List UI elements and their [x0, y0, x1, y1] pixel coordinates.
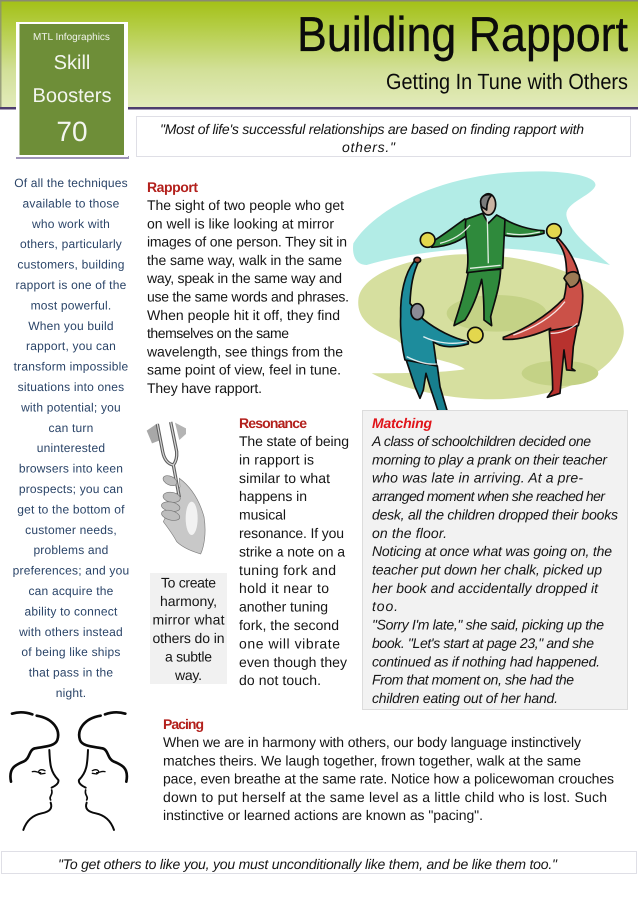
panel: matching: her book and accidentally dropped it — [372, 580, 599, 596]
panel: resonance: tuning fork and — [239, 562, 336, 578]
left column text: Of all the techniques — [14, 176, 128, 190]
panel: rapport: the same way, walk in the same — [147, 252, 342, 268]
panel: resonance: do not touch. — [239, 672, 321, 688]
badge: Skill Boosters 70: Skill — [54, 52, 90, 74]
callout: to create harmony — [150, 573, 227, 684]
panel: resonance: happens in — [239, 488, 307, 504]
callout: to create harmony: others do in — [152, 630, 224, 646]
left column text: available to those — [22, 196, 120, 210]
panel: pacing: instinctive or learned actions are known as "pacing". — [163, 807, 483, 823]
panel: rapport: same point of view, feel in tune. — [147, 362, 341, 378]
left column text: When you build — [28, 319, 114, 333]
panel: resonance: Resonance — [239, 415, 307, 431]
left column text: get to the bottom of — [17, 502, 125, 516]
callout: to create harmony: way. — [174, 667, 202, 683]
panel: matching — [362, 410, 628, 710]
panel: resonance: strike a note on a — [239, 543, 345, 559]
panel: matching: Matching — [372, 415, 432, 431]
left column text: that pass in the — [29, 666, 113, 680]
callout: to create harmony: To create — [161, 574, 216, 590]
left column text: prospects; you can — [19, 482, 123, 496]
panel: rapport — [146, 179, 349, 396]
left column text: with potential; you — [20, 400, 121, 414]
left column text: situations into ones — [18, 380, 124, 394]
panel: matching: book. "Let's start at page 23," and she — [372, 635, 594, 651]
left column text: browsers into keen — [19, 462, 123, 476]
left column text: rapport is one of the — [16, 278, 127, 292]
panel: matching: on the floor. — [372, 525, 447, 541]
top quote: "Most of life's successful relationships are based on finding rapport with — [160, 121, 584, 137]
panel: matching: arranged moment when she reached her — [372, 488, 606, 504]
panel: pacing: pace, even breathe at the same rate. Notice how a policewoman crouches — [163, 771, 614, 787]
panel: resonance: hold it near to — [239, 580, 329, 596]
left column text: customer needs, — [25, 523, 117, 537]
panel: resonance: even though they — [239, 654, 347, 670]
badge: Skill Boosters 70: 70 — [56, 116, 88, 147]
top quote — [136, 116, 630, 156]
panel: resonance: The state of being — [239, 433, 349, 449]
left column text: uninterested — [37, 441, 105, 455]
panel: matching: children eating out of her hand. — [372, 690, 558, 706]
left column text: preferences; and you — [13, 564, 129, 578]
bottom quote: "To get others to like you, you must unconditionally like them, and be like them too." — [58, 856, 558, 872]
left column text: with others instead — [18, 625, 123, 639]
left column text: of being like ships — [21, 645, 121, 659]
panel: matching: continued as if nothing had happened. — [372, 653, 600, 669]
panel: rapport: When people hit it off, they find — [147, 307, 340, 323]
panel: resonance: in rapport is — [239, 451, 314, 467]
panel: rapport: way, speak in the same way and — [146, 270, 342, 286]
icon: two mirrored faces — [10, 712, 127, 830]
panel: pacing: Pacing — [163, 716, 204, 732]
left column text: ability to connect — [24, 604, 118, 618]
icon: hand holding tuning fork — [147, 422, 205, 554]
panel: pacing — [163, 716, 614, 823]
panel: resonance — [239, 415, 349, 688]
panel: resonance: another tuning — [239, 599, 328, 615]
left column text: who work with — [31, 217, 110, 231]
panel: resonance: one will vibrate — [239, 635, 340, 651]
panel: matching: morning to play a prank on their teacher — [372, 451, 608, 467]
panel: rapport: Rapport — [147, 179, 198, 195]
panel: matching: From that moment on, she had the — [372, 672, 574, 688]
illustration: figures in a circle — [353, 171, 624, 412]
header banner — [0, 0, 638, 110]
panel: matching: who was late in arriving. At a pre- — [372, 470, 583, 486]
panel: matching: teacher put down her chalk, picked up — [372, 562, 602, 578]
left column text: can acquire the — [28, 584, 114, 598]
left column text: others, particularly — [20, 237, 122, 251]
panel: pacing: matches theirs. We laugh together, frown together, walk at the same — [163, 752, 581, 768]
badge: Skill Boosters 70 — [16, 22, 129, 159]
callout: to create harmony: harmony, — [160, 593, 217, 609]
panel: matching: desk, all the children dropped their books — [372, 506, 618, 522]
panel: rapport: They have rapport. — [147, 380, 262, 396]
left column text: most powerful. — [31, 298, 111, 312]
callout: to create harmony: a subtle — [165, 648, 212, 664]
panel: rapport: use the same words and phrases. — [147, 288, 349, 304]
left column text: problems and — [33, 543, 109, 557]
panel: rapport: on well is like looking at mirror — [147, 215, 334, 231]
panel: rapport: themselves on the same — [147, 325, 289, 341]
left column text: night. — [56, 686, 86, 700]
panel: resonance: similar to what — [239, 470, 330, 486]
panel: rapport: The sight of two people who get — [147, 197, 344, 213]
left column text: customers, building — [17, 258, 125, 272]
left column text: can turn — [49, 421, 93, 435]
badge: Skill Boosters 70: MTL Infographics — [33, 32, 110, 43]
left column text — [13, 176, 129, 700]
panel: matching: Noticing at once what was going on, the — [372, 543, 612, 559]
left column text: rapport, you can — [26, 339, 116, 353]
panel: rapport: images of one person. They sit in — [147, 234, 347, 250]
panel: pacing: down to put herself at the same level as a little child who is lost. Such — [163, 789, 607, 805]
badge: Skill Boosters 70: Boosters — [33, 85, 111, 107]
panel: matching: "Sorry I'm late," she said, picking up the — [372, 617, 604, 633]
top quote: others." — [342, 139, 396, 155]
panel: matching: A class of schoolchildren decided one — [371, 433, 591, 449]
panel: rapport: wavelength, see things from the — [146, 343, 343, 359]
panel: resonance: musical — [239, 507, 286, 523]
bottom quote — [2, 852, 636, 874]
panel: resonance: fork, the second — [239, 617, 339, 633]
panel: matching: too. — [372, 598, 398, 614]
callout: to create harmony: mirror what — [152, 612, 225, 628]
panel: resonance: resonance. If you — [239, 525, 344, 541]
panel: pacing: When we are in harmony with others, our body language instinctively — [163, 734, 581, 750]
left column text: transform impossible — [14, 360, 128, 374]
